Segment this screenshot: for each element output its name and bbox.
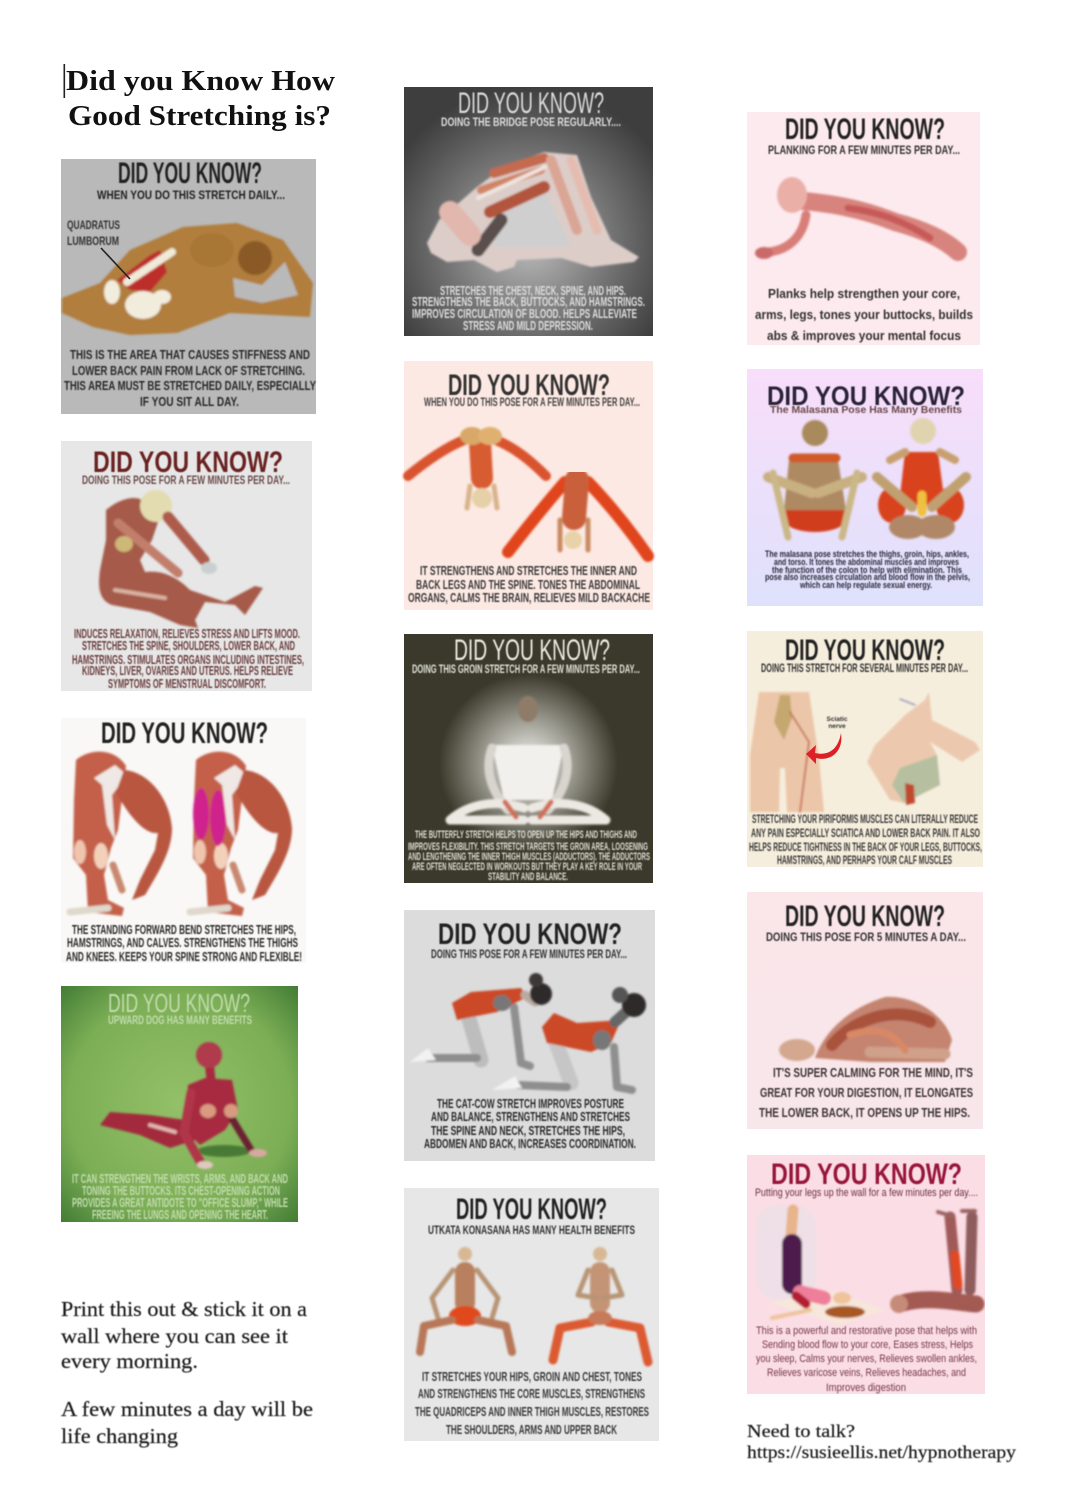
callout: quadratus lumborum: LUMBORUM [67,234,119,248]
caption: AND LENGTHENING THE INNER THIGH MUSCLES (ADDUCTORS). THE ADDUCTORS [408,851,650,863]
label: sciatic nerve: nerve [828,723,846,730]
caption [72,626,304,691]
caption [412,283,645,333]
caption: BACK LEGS AND THE SPINE. TONES THE ABDOMINAL [416,577,640,592]
caption: AND KNEES. KEEPS YOUR SPINE STRONG AND FLEXIBLE! [66,949,302,964]
subheading: UTKATA KONASANA HAS MANY HEALTH BENEFITS [428,1223,635,1237]
caption: THIS IS THE AREA THAT CAUSES STIFFNESS AND [70,347,310,362]
caption: THE CAT-COW STRETCH IMPROVES POSTURE [437,1096,624,1111]
text block: need to talk link: https://susieellis.net/hypnotherapy [747,1442,1016,1462]
heading: DID YOU KNOW? [448,369,610,402]
heading: DID YOU KNOW? [771,1158,962,1191]
panel: legs up the wall [747,1155,985,1394]
figure: right forward bend [190,752,292,916]
figure: seated side stretch [62,223,313,335]
figure: cow pose [492,987,646,1090]
text block: need to talk link: Need to talk? [747,1421,855,1441]
figure: anatomy with legs up the wall [890,1211,976,1313]
caption: AND BALANCE, STRENGTHENS AND STRETCHES [431,1109,630,1124]
subheading: DOING THIS POSE FOR 5 MINUTES A DAY... [766,930,966,944]
subheading: Putting your legs up the wall for a few minutes per day.... [755,1187,978,1199]
caption [72,1171,288,1222]
figure: fold, back view [408,427,546,508]
caption: IF YOU SIT ALL DAY. [140,394,239,409]
figure: cat pose [410,973,552,1066]
caption [756,1325,977,1394]
subheading: DOING THIS POSE FOR A FEW MINUTES PER DAY... [431,947,627,961]
caption: STRETCHES THE CHEST, NECK, SPINE, AND HIPS. [440,283,626,298]
label: sciatic nerve: Sciatic [827,716,848,723]
heading: DID YOU KNOW? [785,900,945,933]
heading: DID YOU KNOW? [458,87,604,120]
caption: THE QUADRICEPS AND INNER THIGH MUSCLES, RESTORES [415,1404,649,1419]
panel: malasana pose [747,369,983,606]
caption: PROVIDES A GREAT ANTIDOTE TO "OFFICE SLUMP," WHILE [72,1195,288,1210]
text block: print this out: Print this out & stick it on a [61,1297,308,1321]
caption: IT STRETCHES YOUR HIPS, GROIN AND CHEST, TONES [422,1369,642,1384]
panel: upward dog [61,986,298,1222]
caption: abs & improves your mental focus [767,328,961,343]
subheading: The Malasana Pose Has Many Benefits [770,405,962,416]
caption: LOWER BACK PAIN FROM LACK OF STRETCHING. [72,363,305,378]
title [64,64,335,132]
caption: and torso. It tones the abdominal muscles and improves [774,557,959,567]
caption [749,814,982,867]
caption: IT CAN STRENGTHEN THE WRISTS, ARMS, AND BACK AND [72,1171,288,1186]
heading: DID YOU KNOW? [767,381,965,411]
caption: THIS AREA MUST BE STRETCHED DAILY, ESPECIALLY [64,378,316,393]
caption [424,1096,636,1151]
heading: DID YOU KNOW? [454,634,610,667]
caption [415,1369,649,1437]
figure: fold, front view [508,480,648,556]
panel: child's pose [747,892,983,1129]
heading: DID YOU KNOW? [785,634,945,667]
figure: bridge pose [427,152,639,272]
figure: upward dog [100,1042,267,1169]
caption: TONING THE BUTTOCKS. ITS CHEST-OPENING ACTION [82,1183,280,1198]
caption: HAMSTRINGS, AND PERHAPS YOUR CALF MUSCLES [777,855,952,867]
panel: daily stretch quadratus lumborum [61,157,316,414]
panel: bridge pose [404,87,653,336]
caption: pose also increases circulation and blood flow in the pelvis, [765,572,970,582]
caption: STRESS AND MILD DEPRESSION. [463,318,593,333]
subheading: WHEN YOU DO THIS POSE FOR A FEW MINUTES PER DAY... [424,395,640,409]
subheading: UPWARD DOG HAS MANY BENEFITS [108,1013,252,1027]
caption: INDUCES RELAXATION, RELIEVES STRESS AND LIFTS MOOD. [74,626,300,641]
subheading: DOING THIS POSE FOR A FEW MINUTES PER DAY... [82,473,290,487]
caption: AND STRENGTHENS THE CORE MUSCLES, STRENGTHENS [418,1386,645,1401]
caption: arms, legs, tones your buttocks, builds [755,307,973,322]
heading: DID YOU KNOW? [101,717,268,750]
caption: SYMPTOMS OF MENSTRUAL DISCOMFORT. [108,676,266,691]
figure: goddess pose, back [420,1247,512,1352]
caption: The malasana pose stretches the thighs, groin, hips, ankles, [765,549,969,559]
caption: IMPROVES CIRCULATION OF BLOOD. HELPS ALLEVIATE [412,306,637,321]
heading: DID YOU KNOW? [785,113,945,146]
figure: anatomical forward fold [99,490,263,628]
title: Did you Know How [66,65,335,97]
caption: THE SHOULDERS, ARMS AND UPPER BACK [446,1422,617,1437]
figure: woman with legs up the wall [756,1205,885,1325]
panel: butterfly groin stretch [404,634,653,883]
figure: malasana front [768,420,862,537]
subheading: PLANKING FOR A FEW MINUTES PER DAY... [768,143,960,157]
caption: ARE OFTEN NEGLECTED IN WORKOUTS BUT THEY PLAY A KEY ROLE IN YOUR [412,861,642,873]
subheading: DOING THE BRIDGE POSE REGULARLY.... [441,115,621,129]
panel: wide-legged forward fold [404,361,653,610]
caption: you sleep, Calms your nerves, Relieves swollen ankles, [756,1353,977,1365]
callout: quadratus lumborum: QUADRATUS [67,218,120,232]
caption: STRENGTHENS THE BACK, BUTTOCKS, AND HAMSTRINGS. [412,294,645,309]
caption: STABILITY AND BALANCE. [488,871,568,883]
caption [408,563,650,605]
caption: which can help regulate sexual energy. [799,580,932,590]
caption: Improves digestion [826,1382,906,1394]
panel: cat-cow stretch [404,910,655,1161]
caption: STRETCHES THE SPINE, SHOULDERS, LOWER BACK, AND [82,638,295,653]
callout: quadratus lumborum [67,218,130,279]
caption: GREAT FOR YOUR DIGESTION, IT ELONGATES [760,1085,973,1100]
heading: DID YOU KNOW? [93,446,283,479]
figure: seated figure pulling knee [867,692,980,805]
heading: DID YOU KNOW? [438,918,622,951]
figure: malasana back [877,418,966,539]
caption [765,549,970,590]
caption: HAMSTRINGS, AND CALVES. STRENGTHENS THE THIGHS [67,935,298,950]
text block: print this out: A few minutes a day will be [61,1397,313,1421]
caption [66,922,302,964]
caption: This is a powerful and restorative pose that helps with [756,1325,977,1337]
heading: DID YOU KNOW? [108,988,250,1018]
caption: HAMSTRINGS. STIMULATES ORGANS INCLUDING INTESTINES, [72,652,304,667]
figure: lower body with sciatic nerve [750,692,824,812]
caption [759,1065,973,1120]
figure: child's pose [779,997,952,1062]
title: Good Stretching is? [68,100,331,132]
caption: THE SPINE AND NECK, STRETCHES THE HIPS, [431,1123,625,1138]
figure: plank [755,177,958,259]
panel: standing forward bend [61,717,306,964]
heading: DID YOU KNOW? [118,157,262,190]
caption: IMPROVES FLEXIBILITY. THIS STRETCH TARGETS THE GROIN AREA, LOOSENING [408,841,648,853]
caption: THE STANDING FORWARD BEND STRETCHES THE HIPS, [72,922,296,937]
text block: print this out: life changing [61,1424,179,1448]
caption: Sending blood flow to your core, Eases stress, Helps [762,1339,973,1351]
panel: plank [747,112,980,345]
panel: utkata konasana [404,1188,659,1441]
panel: seated forward fold [61,441,312,691]
caption: Relieves varicose veins, Relieves headaches, and [767,1367,966,1379]
caption [64,347,316,409]
caption [408,829,650,883]
caption: THE LOWER BACK, IT OPENS UP THE HIPS. [759,1105,970,1120]
text block: print this out [61,1297,313,1448]
label: sciatic nerve [827,716,848,730]
caption: IT STRENGTHENS AND STRETCHES THE INNER AND [420,563,637,578]
caption: ABDOMEN AND BACK, INCREASES COORDINATION. [424,1136,636,1151]
caption: Planks help strengthen your core, [768,286,960,301]
caption: FREEING THE LUNGS AND OPENING THE HEART. [92,1207,268,1222]
caption: THE BUTTERFLY STRETCH HELPS TO OPEN UP THE HIPS AND THIGHS AND [415,829,637,841]
text block: need to talk link [747,1421,1016,1462]
icon: red curved arrow [806,733,841,764]
heading: DID YOU KNOW? [456,1193,607,1226]
text block: print this out: wall where you can see it [61,1324,288,1348]
caption: IT'S SUPER CALMING FOR THE MIND, IT'S [773,1065,973,1080]
figure: butterfly pose [450,696,606,820]
caption: the function of the colon to help with elimination. This [772,565,962,575]
caption: KIDNEYS, LIVER, OVARIES AND UTERUS. HELPS RELIEVE [82,663,293,678]
caption [755,286,973,343]
figure: left forward bend [70,752,172,916]
caption: ORGANS, CALMS THE BRAIN, RELIEVES MILD BACKACHE [408,590,650,605]
subheading: WHEN YOU DO THIS STRETCH DAILY... [97,188,285,202]
panel: piriformis stretch [747,631,983,867]
text block: print this out: every morning. [61,1349,198,1373]
figure: goddess pose, front [553,1247,648,1362]
subheading: DOING THIS GROIN STRETCH FOR A FEW MINUTES PER DAY... [412,662,640,676]
